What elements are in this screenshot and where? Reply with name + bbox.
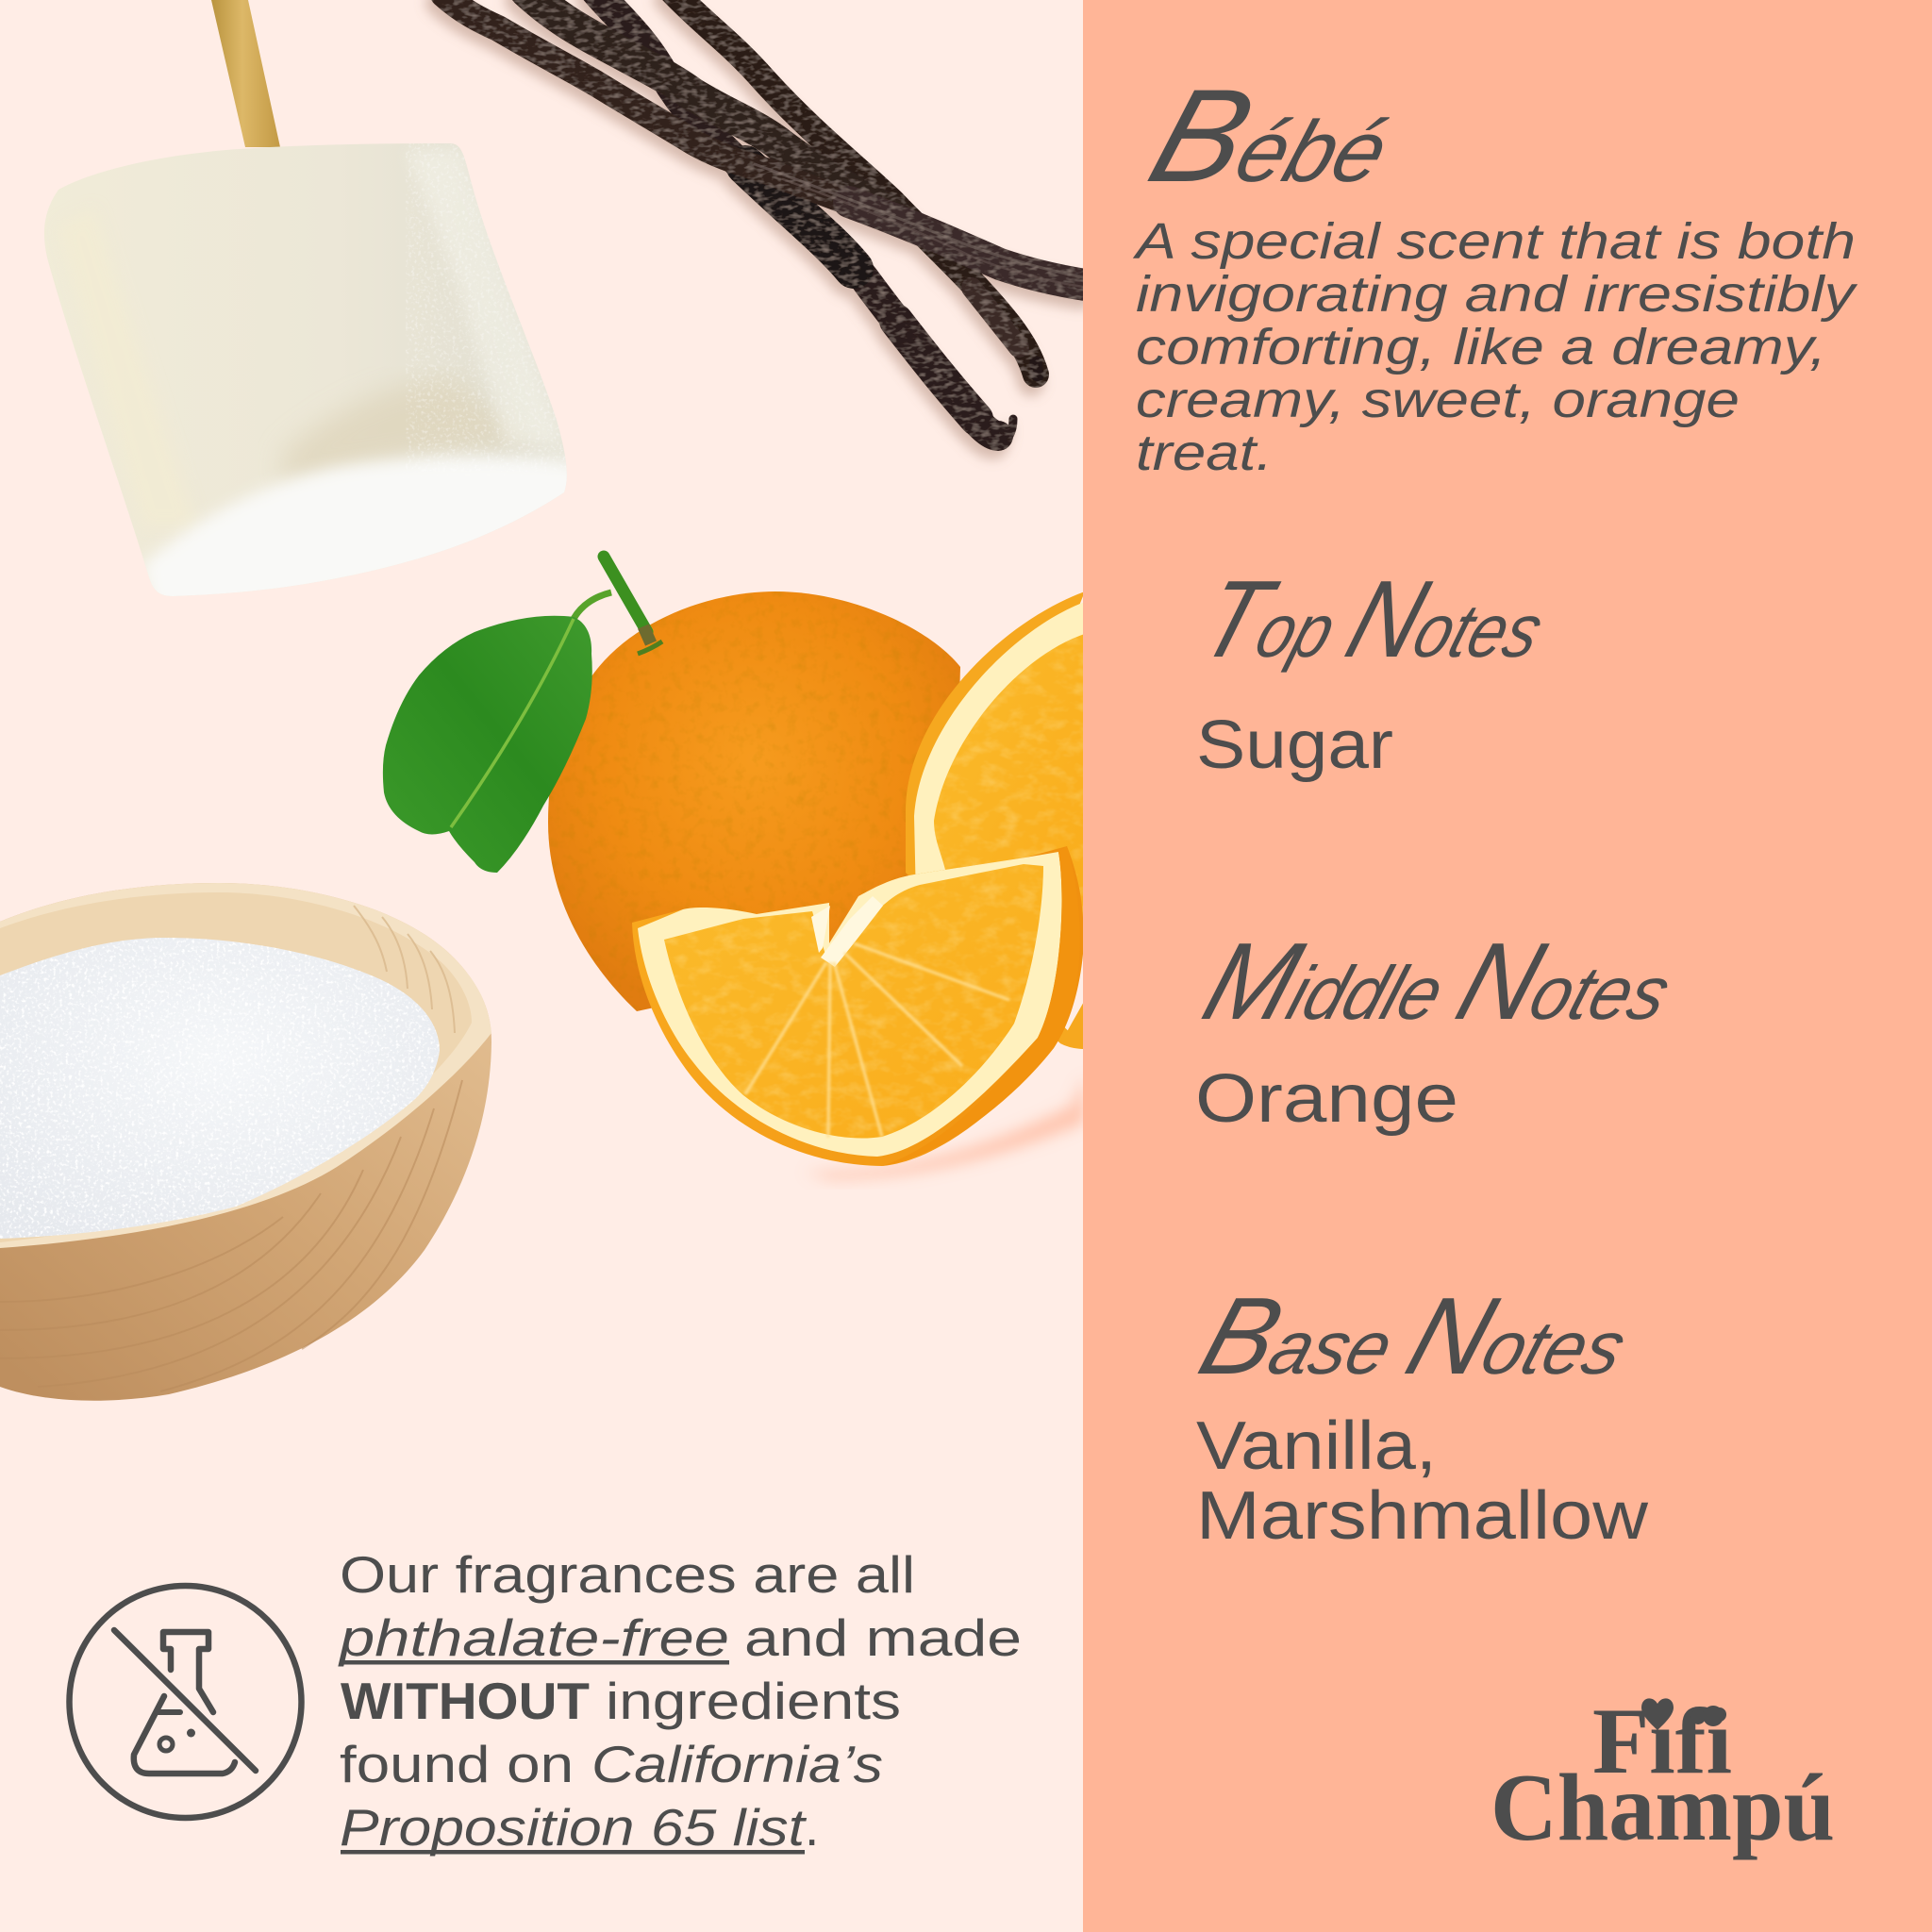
image: halved orange behind [906,591,1085,1049]
text block: description [1132,213,1858,481]
sugar pile [0,938,440,1239]
logo: Fifi Champú [1491,1689,1835,1861]
image: vanilla pods [443,0,1085,443]
image: orange shadow on ground [803,1075,1085,1179]
text block: fragrance statement [338,1545,1022,1857]
text block: fragrance statement: phthalate-free [338,1608,729,1667]
icon: heart over i [1641,1698,1674,1730]
panel: left background [0,0,1083,1932]
heading: Bébé: Bébé [1134,62,1413,209]
text block: description: creamy, sweet, orange [1136,372,1740,428]
text block: fragrance statement: . [805,1798,819,1857]
icon: leaf [383,616,592,873]
panel: right background [1083,0,1932,1932]
heading: Top Notes: Top Notes [1187,558,1563,680]
text: Sugar: Sugar [1196,708,1393,783]
logo: Fifi Champú: Champú [1491,1755,1835,1861]
icon: stem [574,557,662,654]
image: whole orange with leaf [383,557,960,1011]
image: marshmallow on stick [28,0,585,632]
text block: description: treat. [1136,425,1273,481]
image: orange wedge [632,846,1084,1166]
text block: fragrance statement: and made [744,1608,1022,1667]
logo: Fifi Champú: Fifi [1592,1689,1732,1793]
interior wood stripes [354,906,455,1033]
text block: fragrance statement: California’s [591,1735,883,1793]
text block: fragrance statement: WITHOUT [341,1672,590,1730]
vanilla pod: right tip pod [672,0,1038,375]
text block: description: comforting, like a dreamy, [1136,319,1826,375]
text block: fragrance statement: Our fragrances are all [340,1545,915,1604]
text: Vanilla, Marshmallow [1196,1408,1649,1554]
text: Orange: Orange [1195,1061,1458,1137]
vanilla pod: upper pod [526,0,892,212]
heading: Middle Notes: Middle Notes [1191,921,1690,1042]
image: bowl of sugar [0,883,491,1401]
bowl rim [0,883,491,1248]
text block: fragrance statement: ingredients [606,1672,901,1730]
vanilla pod: long pod reaching panel edge [443,0,1085,287]
text block: fragrance statement: Proposition 65 list [340,1798,808,1857]
icon: logo dots [1690,1706,1724,1726]
text: Vanilla, Marshmallow: Vanilla, [1196,1408,1437,1484]
text: Vanilla, Marshmallow: Marshmallow [1196,1478,1649,1554]
text block: fragrance statement: found on [340,1735,574,1793]
vanilla pod: lower long pod [595,0,1013,443]
heading: Base Notes: Base Notes [1187,1275,1646,1397]
bowl outer [0,883,491,1401]
text block: description: A special scent that is both [1132,213,1856,270]
icon: no phthalates flask [70,1586,302,1818]
text block: description: invigorating and irresistibly [1136,266,1858,323]
wood grain [0,1080,462,1391]
bowl interior [0,892,472,1242]
